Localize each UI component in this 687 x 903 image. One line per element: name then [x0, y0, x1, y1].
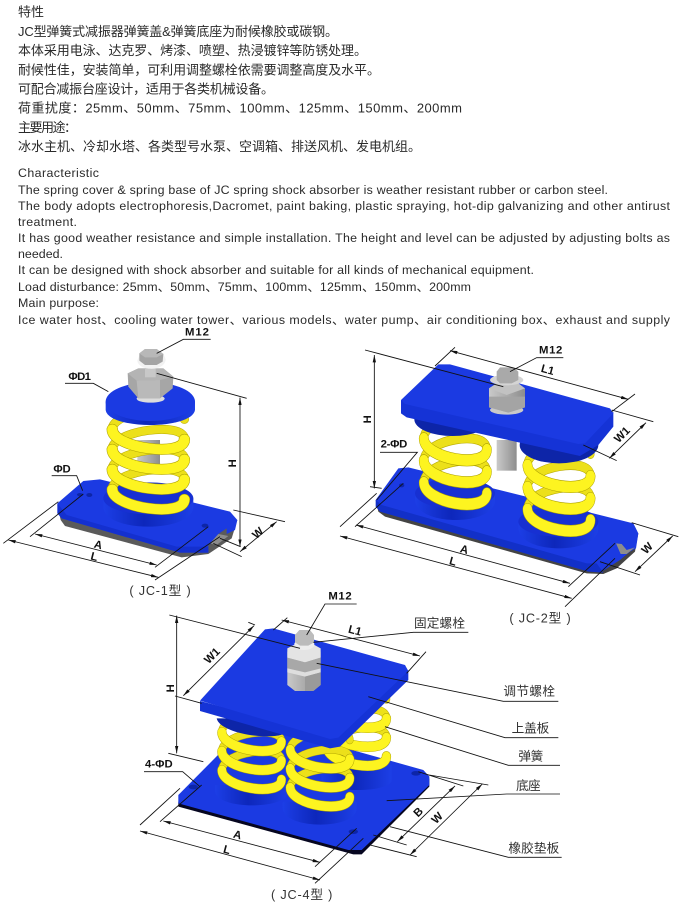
threaded rod — [137, 440, 160, 470]
labels: L — [222, 844, 232, 857]
labels: L — [89, 551, 99, 564]
spring cup — [103, 482, 193, 527]
labels: 2-ΦD — [381, 438, 407, 450]
threaded rod — [497, 440, 517, 471]
text block: Chinese description: 冰水主机、冷却水塔、各类型号水泵、空调箱、排送风机、发电机组。 — [18, 139, 421, 154]
text block: English description: treatment. — [18, 215, 77, 229]
bolt and nut — [128, 349, 173, 403]
text block: English description: The body adopts electrophoresis,Dacromet, paint baking, plastic spraying, hot-dip galvanizing and other antirust — [18, 199, 671, 213]
labels: 4-ΦD — [145, 759, 173, 771]
labels: ΦD — [53, 464, 71, 476]
diagram: JC-2 — [340, 345, 678, 626]
labels — [362, 345, 656, 569]
text block: English description: The spring cover & spring base of JC spring shock absorber is weather resistant rubber or carbon steel. — [18, 183, 608, 197]
spring cups — [415, 478, 598, 548]
text block: Chinese description: 特性 — [18, 4, 44, 20]
labels: 橡胶垫板 — [508, 840, 560, 855]
spring cups — [215, 765, 392, 825]
labels: 弹簧 — [518, 749, 544, 764]
labels: H — [165, 684, 177, 692]
labels: L1 — [347, 624, 363, 639]
labels: A — [93, 539, 103, 552]
diagram: JC-1 — [3, 326, 285, 598]
text block: English description: Ice water host、cooling water tower、various models、water pump、air conditioning box、exhaust and supply — [18, 313, 671, 327]
labels: W1 — [202, 646, 223, 666]
labels: M12 — [328, 590, 352, 602]
right spring — [527, 443, 590, 531]
labels: A — [459, 543, 470, 557]
base plate — [376, 467, 638, 574]
spring — [112, 409, 184, 509]
labels: W — [430, 810, 446, 826]
middle spring — [290, 731, 350, 806]
text block: Chinese description: 本体采用电泳、达克罗、烤漆、喷塑、热浸镀锌等防锈处理。 — [18, 43, 367, 58]
callout leaders — [313, 632, 562, 857]
dimension lines — [340, 347, 678, 607]
base plate — [178, 722, 429, 854]
labels: A — [232, 829, 243, 842]
labels — [145, 590, 560, 857]
text block: Chinese description: 可配合减振台座设计，适用于各类机械设备。 — [18, 82, 274, 96]
text block: English description: It can be designed with shock absorber and suitable for all kinds of mechanical equipment. — [18, 263, 534, 277]
labels: L — [448, 555, 458, 569]
labels: 固定螺栓 — [414, 617, 465, 631]
text block: English description: needed. — [18, 247, 63, 261]
left spring — [424, 416, 487, 504]
labels: B — [412, 806, 426, 820]
labels: 上盖板 — [512, 722, 550, 736]
top cap — [106, 382, 195, 425]
labels: H — [362, 415, 374, 423]
labels: W1 — [612, 425, 633, 445]
text block: English description — [18, 166, 671, 327]
rear spring — [327, 690, 386, 766]
base plate — [57, 479, 237, 557]
labels: M12 — [539, 345, 562, 357]
bolt and nut — [489, 367, 525, 415]
caption: ( JC-1型 ) — [129, 584, 191, 598]
cover plate — [200, 628, 408, 748]
text block: Chinese description: JC型弹簧式减振器弹簧盖&弹簧底座为耐候橡胶或碳钢。 — [18, 24, 338, 39]
text block: English description: Main purpose: — [18, 296, 99, 310]
caption: ( JC-4型 ) — [271, 888, 332, 902]
labels — [53, 326, 267, 564]
bolts and nuts — [287, 630, 321, 691]
labels: H — [227, 459, 239, 467]
labels: L1 — [540, 363, 555, 378]
text block: English description: Load disturbance: 25mm、50mm、75mm、100mm、125mm、150mm、200mm — [18, 280, 471, 294]
text block: English description: It has good weather resistance and simple installation. The height and level can be adjusted by adjusting bolts as — [18, 231, 670, 245]
text block: Chinese description: 耐候性佳，安装简单，可利用调整螺栓依需要调整高度及水平。 — [18, 62, 380, 78]
labels: M12 — [185, 326, 209, 338]
labels: W — [250, 525, 267, 542]
cover plate — [401, 364, 613, 463]
dimension lines — [3, 339, 285, 580]
dimension lines — [140, 604, 488, 883]
left spring — [222, 713, 281, 789]
text block: Chinese description: 荷重扰度：25mm、50mm、75mm、100mm、125mm、150mm、200mm — [18, 100, 462, 116]
labels: 调节螺栓 — [503, 685, 555, 699]
labels: W — [640, 541, 656, 557]
caption: ( JC-2型 ) — [509, 612, 571, 626]
text block: Chinese description — [18, 4, 462, 154]
text block: English description: Characteristic — [18, 166, 99, 180]
diagram: JC-4 — [140, 590, 562, 902]
labels: 底座 — [516, 778, 541, 793]
text block: Chinese description: 主要用途： — [18, 120, 77, 135]
labels: ΦD1 — [68, 371, 91, 383]
